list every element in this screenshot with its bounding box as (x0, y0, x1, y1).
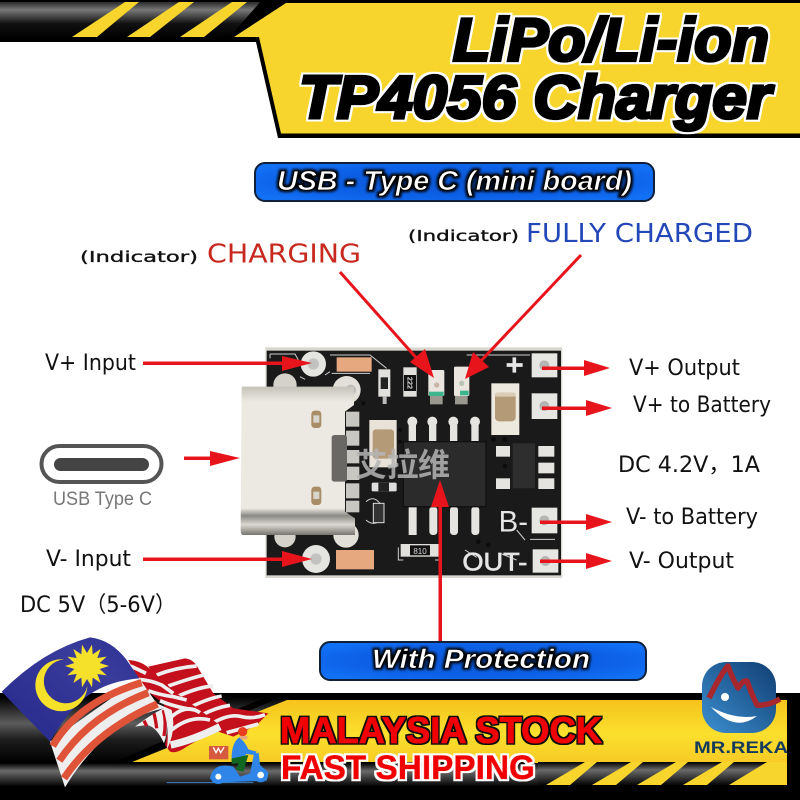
label: charging indicator: (Indicator) (80, 248, 198, 266)
icon: delivery scooter (167, 727, 268, 784)
label: fully charged indicator: FULLY CHARGED (526, 219, 753, 249)
circuit board photo (241, 347, 562, 578)
label: V+ output: V+ Output (629, 356, 740, 381)
arrow: protection chip (431, 480, 449, 642)
badge: USB Type C mini board: USB - Type C (mini board) (277, 165, 632, 196)
title: LiPo/Li-ion (453, 6, 769, 74)
label: input voltage: DC 5V（5-6V） (20, 593, 176, 618)
arrow: fully charged LED (465, 255, 581, 379)
label: output voltage: DC 4.2V，1A (618, 453, 760, 478)
label: V+ to battery: V+ to Battery (633, 393, 771, 418)
arrow: V+ output (542, 360, 610, 376)
footer banner (0, 693, 800, 800)
arrow: V+ to battery (542, 400, 612, 416)
label: V- to battery: V- to Battery (626, 505, 758, 530)
label: charging indicator: CHARGING (207, 240, 361, 270)
label: V- input: V- Input (46, 547, 131, 572)
circuit board photo: OUT- (462, 549, 527, 577)
arrow: V+ input (143, 356, 312, 371)
USB Type C port icon (42, 446, 162, 510)
label: fully charged indicator: (Indicator) (408, 227, 519, 245)
arrow: V- input (143, 551, 312, 567)
Malaysian flag (2, 637, 268, 787)
logo: MR.REKA (694, 662, 788, 757)
arrow: V- to battery (540, 514, 612, 530)
header banner (0, 0, 800, 138)
label: fully charged indicator (408, 219, 753, 249)
label: V- output: V- Output (629, 549, 734, 574)
label: charging indicator (80, 240, 361, 270)
title (299, 6, 775, 131)
circuit board photo: 810 (413, 547, 427, 556)
USB Type C port icon: USB Type C (53, 489, 152, 510)
logo: MR.REKA: MR.REKA (694, 738, 788, 757)
heading: Malaysia stock: MALAYSIA STOCK (280, 710, 602, 751)
arrow: charging LED (340, 272, 434, 378)
circuit board photo: B- (499, 506, 528, 539)
label: V+ input: V+ Input (45, 351, 136, 376)
arrow: USB port (184, 451, 240, 466)
title: TP4056 Charger (299, 64, 775, 131)
circuit board photo: 222 (406, 377, 415, 389)
badge: with protection: With Protection (372, 644, 590, 674)
arrow: V- output (540, 553, 612, 569)
badge: with protection (320, 642, 646, 680)
heading: fast shipping: FAST SHIPPING (281, 749, 535, 787)
watermark: 艾拉维 (355, 447, 450, 483)
